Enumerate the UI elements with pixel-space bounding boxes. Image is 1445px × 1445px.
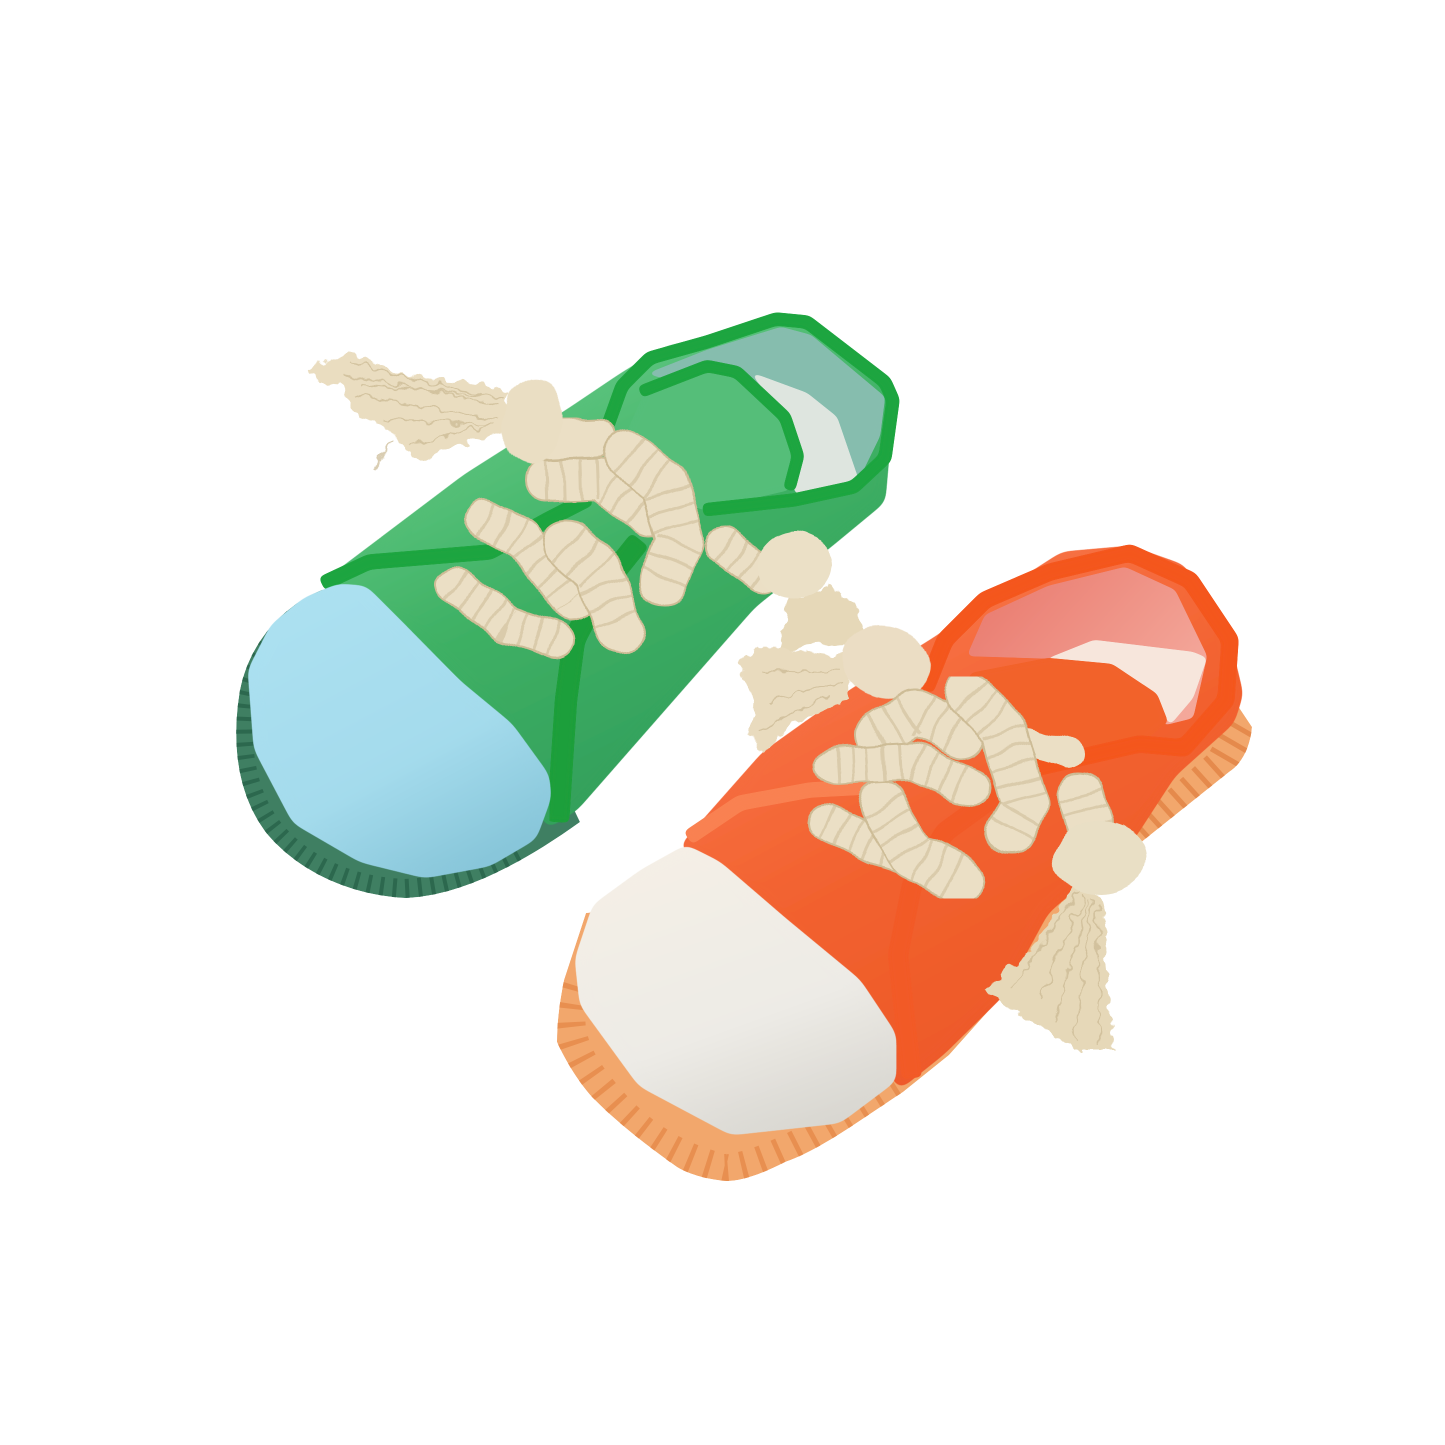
light blue toe cap (248, 584, 551, 878)
orange shoe laces (825, 695, 1092, 880)
green tongue (610, 364, 798, 510)
orange tongue (950, 658, 1168, 764)
lower strap right (898, 790, 1003, 1078)
green shoe sole (236, 590, 580, 898)
white stuffing (750, 372, 859, 494)
white toe cap (575, 845, 896, 1135)
orange shoe sole (557, 706, 1252, 1181)
lower strap left (688, 786, 884, 838)
collar binding (925, 553, 1230, 768)
right knot and long tassel (985, 822, 1147, 1050)
orange canvas upper (679, 546, 1243, 1090)
top-left rope tassel (310, 352, 507, 470)
pink lining (967, 567, 1207, 725)
green shoe laces (455, 438, 763, 640)
top knot (496, 373, 570, 469)
tongue binding (640, 366, 798, 490)
illustration: pair of sneaker toys (236, 312, 1252, 1181)
green shoe (236, 314, 897, 898)
collar binding (599, 319, 893, 510)
lower strap right (558, 540, 640, 822)
lower strap left (322, 498, 590, 584)
inner lining (646, 327, 885, 492)
right knot and tassel (758, 532, 868, 650)
white stuffing (1044, 640, 1207, 725)
green canvas upper (317, 314, 897, 829)
orange shoe (557, 546, 1252, 1181)
upper rope tassel and knot (738, 616, 937, 752)
